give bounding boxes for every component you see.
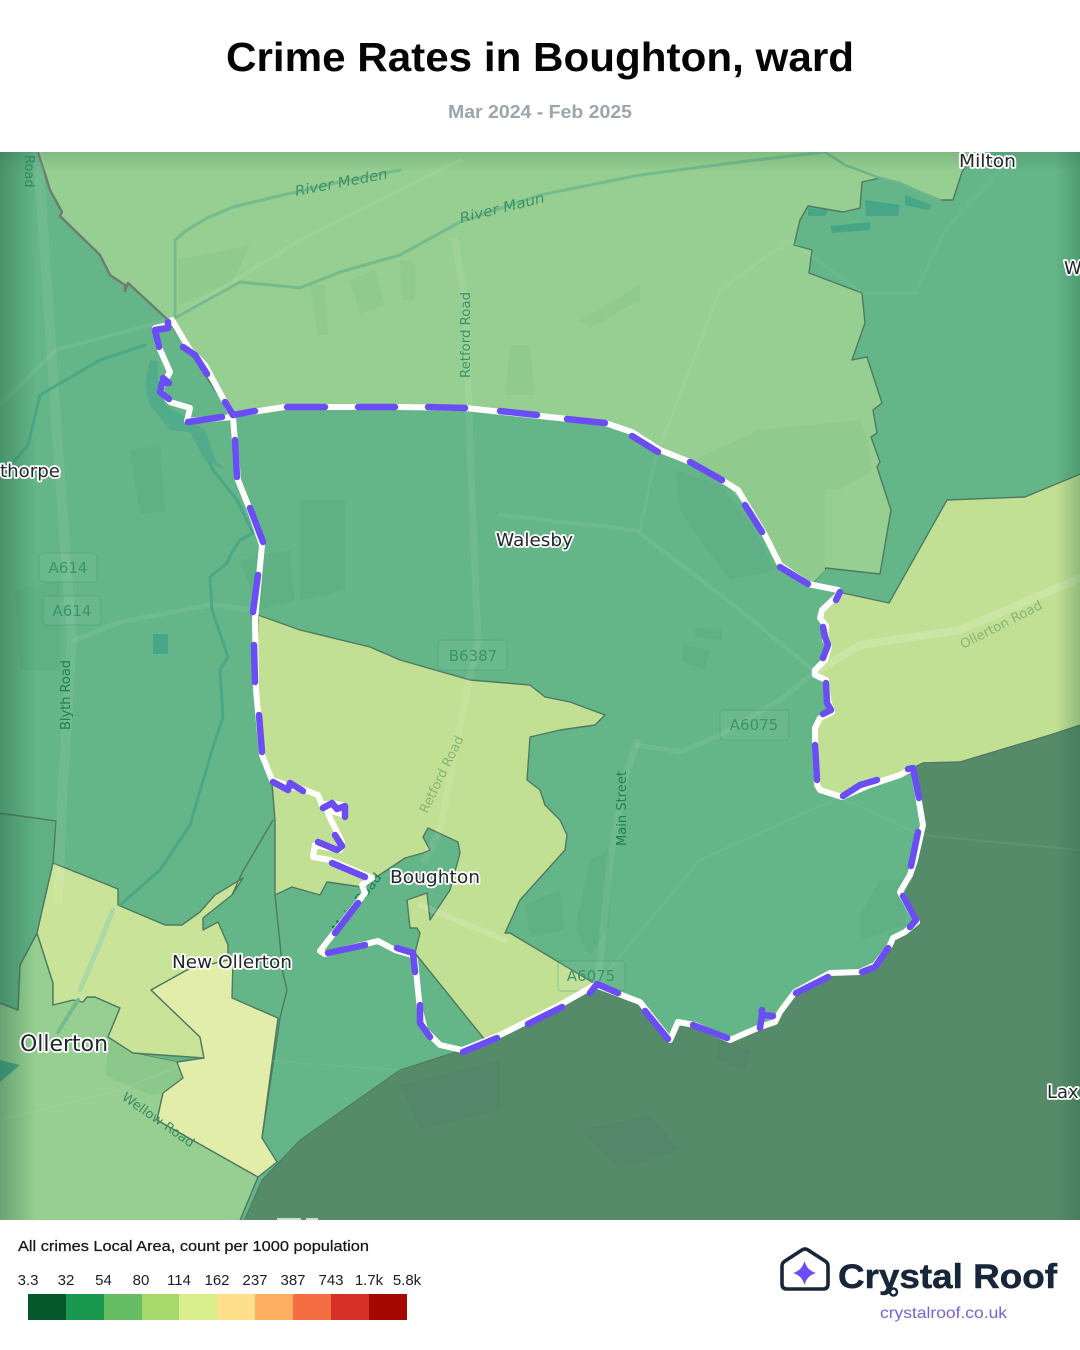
zone: western green strip [0,812,56,1010]
zone: pale yellow area [151,960,278,1177]
legend tick labels: 743 [318,1272,344,1289]
zone: eastern yellow-green area [815,470,1080,797]
zone: northern light green area [36,145,980,584]
vignette [0,152,1080,1220]
zone: Ollerton light green area [0,933,258,1230]
road shields [39,553,789,991]
label: Wellow Road: Wellow Road [119,1090,197,1151]
logo: Crystal Roof [782,1249,1058,1322]
subtitle: date range: Mar 2024 - Feb 2025 [448,101,632,122]
shield: A614 upper [39,553,97,582]
legend tick labels: 387 [280,1272,306,1289]
label: Retford Road north: Retford Road [459,292,474,378]
legend tick labels: 3.3 [18,1272,38,1289]
legend colour bar [28,1294,407,1320]
field patches in the north [178,245,872,584]
label: New Ollerton: New Ollerton [172,952,292,973]
shield: A614 lower: A614 [53,602,91,620]
roads [0,152,1080,1120]
label: Main Road: Main Road [329,870,385,936]
legend [18,1238,422,1320]
label: Retford Road south: Retford Road [417,734,467,816]
rivers [0,152,940,1082]
label: Milton: Milton [959,151,1016,172]
legend tick labels: 54 [95,1272,112,1289]
shield: A6075 south: A6075 [567,967,615,985]
website url: crystalroof.co.uk [880,1305,1008,1322]
shield: A6075 east [720,710,789,740]
zone outline: heavy north-west border [38,152,168,320]
label: Walesby: Walesby [496,530,573,551]
ward boundary [155,320,923,1052]
legend tick labels: 237 [242,1272,268,1289]
icon: house with star [782,1249,828,1289]
label: Ollerton: Ollerton [20,1032,108,1057]
label: River Maun: River Maun [458,190,546,227]
logo y keyhole tail [890,1288,897,1296]
legend tick labels: 32 [58,1272,74,1289]
shield: A614 lower [43,596,101,625]
label: thorpe clipped: thorpe [0,461,60,482]
boundary: purple dashes [155,322,919,1052]
label: Ollerton Road: Ollerton Road [958,598,1045,653]
shield: A6075 east: A6075 [730,716,778,734]
shield: A614 upper: A614 [49,559,87,577]
legend title: All crimes Local Area, count per 1000 population [18,1238,369,1255]
boundary: white casing [155,320,923,1050]
legend tick labels [18,1272,422,1289]
legend tick labels: 5.8k [393,1272,422,1289]
label: Road top-left: Road [21,155,36,188]
lake: west of the ward [145,360,225,470]
label: Main Street: Main Street [615,771,630,846]
zone: southern dark green area [240,722,1080,1230]
boundary lines between zones [262,895,287,1138]
shield: B6387: B6387 [449,647,497,665]
darker woodland patches [15,445,905,955]
label: River Meden: River Meden [294,166,389,200]
zone: New Ollerton yellow-green area [37,863,243,1058]
shield: A6075 south [558,961,625,991]
place labels [0,151,1080,1103]
zone: central Boughton yellow-green area [256,615,605,1040]
label: Boughton: Boughton [390,867,480,888]
legend tick labels: 162 [204,1272,230,1289]
label: Blyth Road: Blyth Road [59,660,74,730]
road and river labels [21,155,1045,1151]
legend tick labels: 114 [167,1272,191,1289]
legend tick labels: 1.7k [355,1272,384,1289]
legend tick labels: 80 [133,1272,149,1289]
clipped label fragment at map bottom [277,1218,318,1220]
logo wordmark: Crystal Roof [838,1258,1058,1296]
shield: B6387 [438,640,507,670]
title: Crime Rates in Boughton, ward [226,34,854,80]
label: Lax clipped: Lax [1047,1082,1079,1103]
